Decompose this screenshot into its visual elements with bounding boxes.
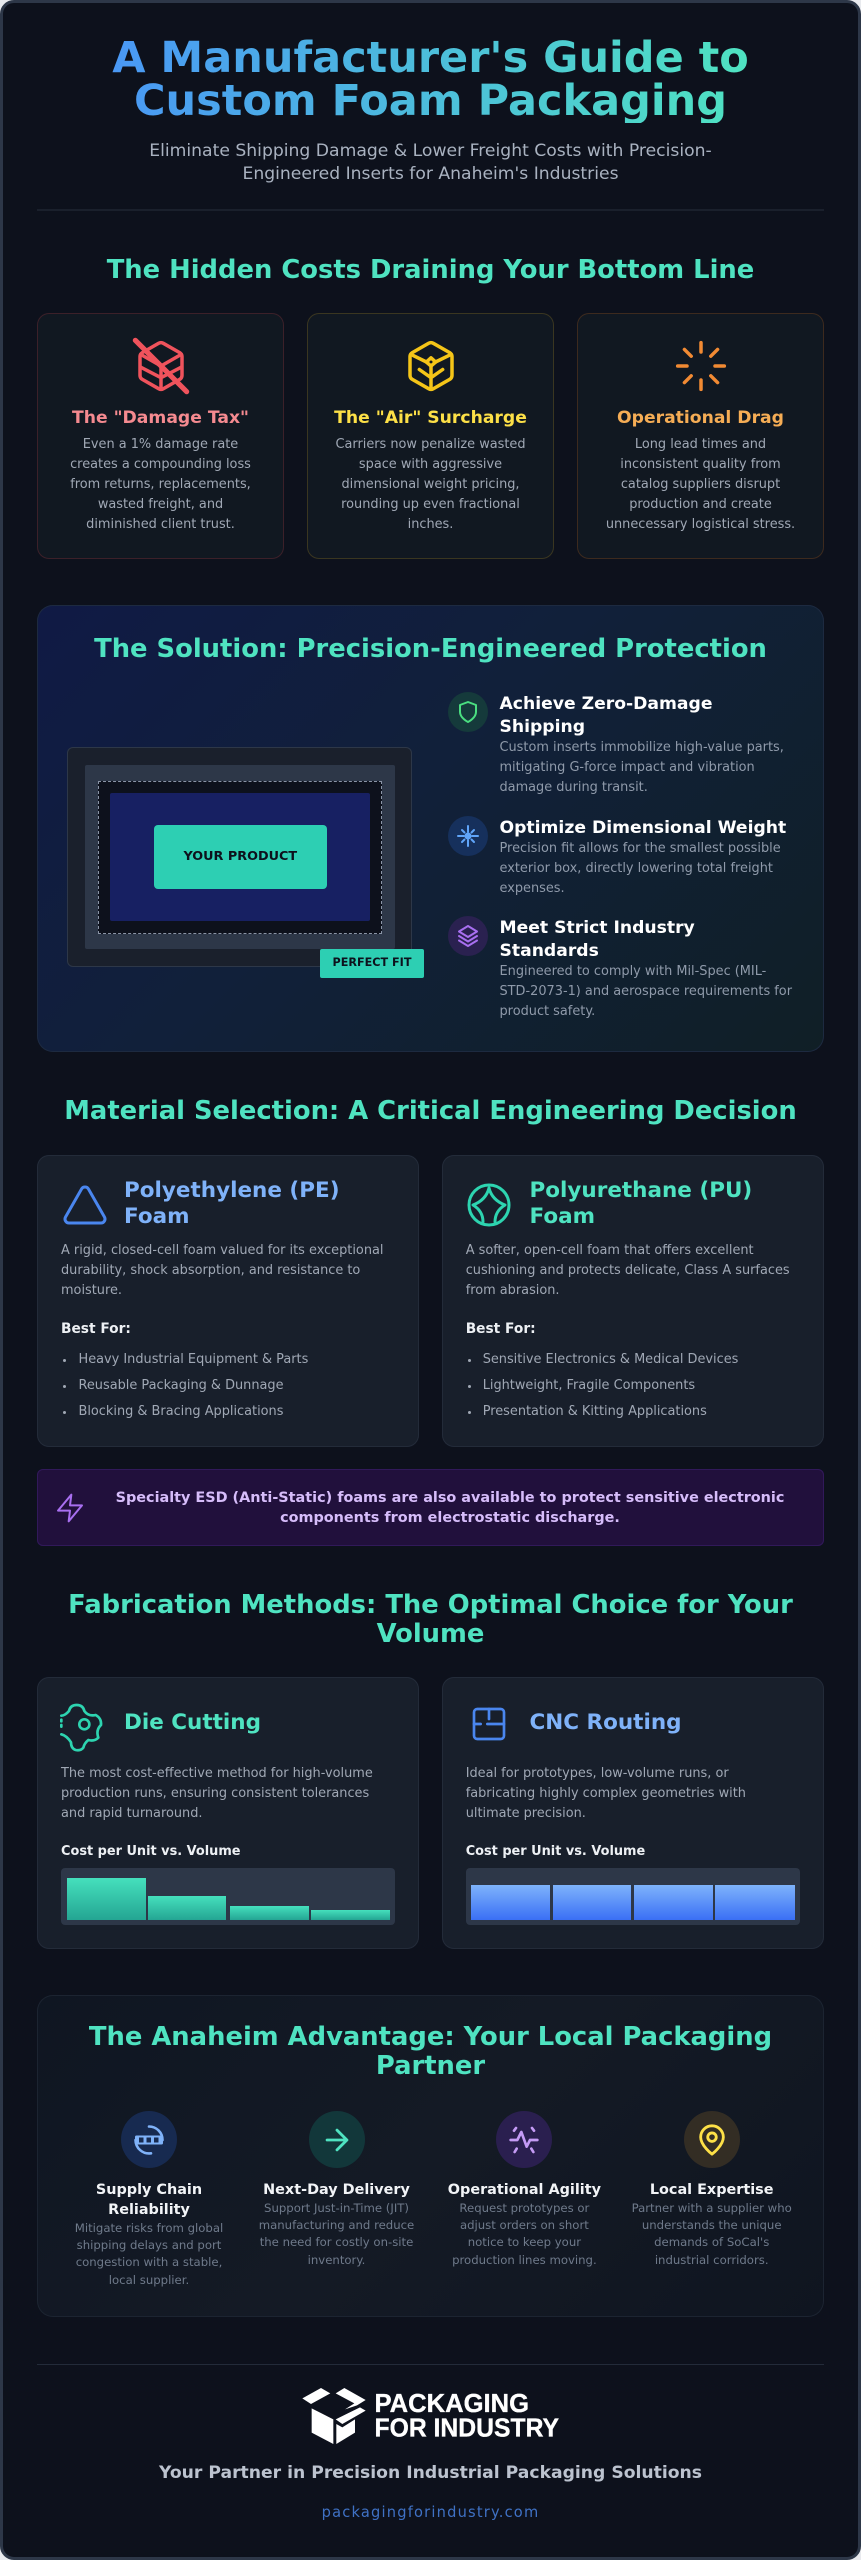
icon: shield — [448, 692, 488, 732]
callout text: components from electrostatic discharge. — [280, 1510, 620, 1526]
panel: die cutting — [37, 1677, 419, 1949]
benefit title: Optimize Dimensional Weight — [500, 818, 786, 838]
perfect fit tag — [320, 949, 424, 978]
benefit title — [500, 918, 695, 960]
logo: packaging for industry — [295, 2380, 570, 2452]
subtitle: Eliminate Shipping Damage & Lower Freight Costs with Precision- — [149, 141, 712, 161]
product: YOUR PRODUCT — [183, 849, 297, 864]
bar — [66, 1878, 146, 1920]
bar — [715, 1885, 795, 1920]
best for label: Best For: — [61, 1321, 131, 1337]
icon: foam cell — [468, 1184, 510, 1226]
icon: zap — [57, 1494, 83, 1522]
advantage text: production lines moving. — [452, 2253, 597, 2267]
title: A Manufacturer's Guide to — [112, 32, 749, 82]
perfect fit tag: PERFECT FIT — [333, 956, 411, 969]
subtitle — [149, 141, 712, 184]
logo wordmark: PACKAGING — [374, 2388, 529, 2418]
icon: damaged box — [132, 338, 190, 394]
panel: polyurethane — [442, 1155, 824, 1447]
heading: hidden costs: The Hidden Costs Draining Your Bottom Line — [107, 254, 754, 284]
chart label: Cost per Unit vs. Volume — [61, 1844, 241, 1859]
foam cavity — [98, 781, 382, 934]
material title — [530, 1178, 752, 1229]
benefit title: Standards — [500, 940, 599, 960]
heading: solution: The Solution: Precision-Engineered Protection — [94, 634, 767, 664]
panel: cnc routing — [442, 1677, 824, 1949]
benefit: standards — [448, 916, 792, 1018]
benefit text: Custom inserts immobilize high-value parts, — [500, 740, 784, 754]
icon: gear — [60, 1704, 102, 1752]
method text: Ideal for prototypes, low-volume runs, or — [466, 1766, 729, 1781]
advantage text: demands of SoCal's — [654, 2235, 769, 2249]
advantage text: Mitigate risks from global — [75, 2221, 223, 2235]
card text: diminished client trust. — [86, 517, 235, 532]
advantage title: Local Expertise — [650, 2182, 774, 2198]
icon: loader — [676, 340, 726, 392]
best for label: Best For: — [466, 1321, 536, 1337]
card text: catalog suppliers disrupt — [621, 477, 780, 492]
card text: production and create — [629, 497, 772, 512]
best for list — [63, 1352, 308, 1419]
card text: unnecessary logistical stress. — [606, 517, 795, 532]
benefit text: expenses. — [500, 880, 565, 896]
header — [112, 32, 749, 184]
best for list: Heavy Industrial Equipment & Parts — [78, 1352, 308, 1367]
heading: fabrication methods: Volume — [377, 1618, 484, 1648]
advantage: local expertise — [632, 2111, 792, 2267]
panel: polyethylene — [37, 1155, 419, 1447]
material title: Polyurethane (PU) — [530, 1178, 752, 1203]
advantage: operational agility — [448, 2111, 601, 2267]
advantage title: Next-Day Delivery — [263, 2182, 410, 2198]
tagline: Your Partner in Precision Industrial Packaging Solutions — [159, 2463, 702, 2483]
advantage text: inventory. — [308, 2253, 365, 2267]
advantage text: Support Just-in-Time (JIT) — [264, 2201, 409, 2215]
advantage text: adjust orders on short — [460, 2218, 589, 2232]
panel: operational drag — [577, 313, 824, 559]
card text — [335, 437, 526, 532]
material text: from abrasion. — [466, 1283, 560, 1298]
advantage text: Request prototypes or — [459, 2201, 589, 2215]
best for list: Presentation & Kitting Applications — [483, 1404, 707, 1419]
advantage title: Reliability — [108, 2202, 190, 2218]
material text: moisture. — [61, 1283, 122, 1298]
card text: dimensional weight pricing, — [341, 477, 520, 492]
bar — [634, 1885, 713, 1920]
benefit title — [500, 694, 712, 736]
benefit text: damage during transit. — [500, 780, 648, 794]
chart label: Cost per Unit vs. Volume — [466, 1844, 645, 1859]
method text: ultimate precision. — [466, 1806, 586, 1821]
heading: material selection: Material Selection: A Critical Engineering Decision — [64, 1096, 797, 1126]
heading: advantage: Partner — [376, 2051, 485, 2081]
icon: triangle — [64, 1186, 106, 1224]
logo wordmark: FOR INDUSTRY — [374, 2412, 559, 2442]
title — [112, 36, 749, 123]
diagram: foam insert — [67, 747, 412, 967]
advantage text: industrial corridors. — [655, 2253, 769, 2267]
benefit text: STD-2073-1) and aerospace requirements for — [500, 984, 792, 998]
material text: A softer, open-cell foam that offers excellent — [466, 1243, 754, 1258]
advantage text: Partner with a supplier who — [632, 2201, 792, 2215]
card text — [606, 437, 795, 532]
card title: The "Air" Surcharge — [334, 408, 527, 428]
material text: cushioning and protects delicate, Class A surfaces — [466, 1263, 790, 1278]
advantage: next-day delivery — [259, 2111, 414, 2267]
card text: wasted freight, and — [98, 497, 223, 512]
panel: air surcharge — [307, 313, 554, 559]
best for list: Sensitive Electronics & Medical Devices — [483, 1352, 738, 1367]
callout: ESD foams — [37, 1469, 824, 1546]
advantage text: understands the unique — [642, 2218, 782, 2232]
benefit: dimensional weight — [448, 816, 786, 896]
method text — [466, 1766, 746, 1821]
icon: arrow — [308, 2111, 364, 2168]
benefit text — [500, 740, 784, 794]
method text: The most cost-effective method for high-volume — [61, 1766, 373, 1781]
benefit text: exterior box, directly lowering total freight — [500, 860, 773, 876]
logo mark — [302, 2388, 366, 2444]
benefit: zero damage — [448, 692, 784, 794]
callout text: Specialty ESD (Anti-Static) foams are also available to protect sensitive electronic — [116, 1490, 784, 1506]
card text: from returns, replacements, — [70, 477, 251, 492]
advantage text — [630, 2200, 794, 2269]
logo wordmark — [374, 2388, 559, 2442]
box wall — [84, 765, 395, 949]
bar — [148, 1896, 226, 1920]
card text: space with aggressive — [359, 457, 502, 472]
card text: creates a compounding loss — [70, 457, 251, 472]
method text — [60, 1766, 373, 1821]
icon: cnc frame — [472, 1708, 506, 1740]
title: Custom Foam Packaging — [134, 76, 727, 126]
icon: layers — [448, 916, 488, 956]
footer — [37, 2380, 824, 2530]
advantage text: the need for costly on-site — [260, 2235, 413, 2249]
advantage text: local supplier. — [109, 2273, 189, 2287]
icon: supply chain — [121, 2111, 177, 2168]
product — [154, 825, 327, 889]
bar — [553, 1885, 631, 1920]
benefit text: mitigating G-force impact and vibration — [500, 760, 755, 774]
card text: inches. — [408, 517, 453, 532]
card text: Long lead times and — [635, 437, 766, 452]
advantage title: Operational Agility — [448, 2182, 601, 2198]
bar — [471, 1885, 550, 1920]
benefit text — [500, 964, 792, 1018]
advantage title — [96, 2182, 202, 2218]
card text: Carriers now penalize wasted — [335, 437, 526, 452]
panel: the solution — [37, 605, 824, 1052]
card text: rounding up even fractional — [341, 497, 520, 512]
benefit text: Precision fit allows for the smallest possible — [500, 840, 781, 856]
best for list — [468, 1352, 738, 1419]
website: packagingforindustry.com — [322, 2504, 539, 2521]
callout text — [116, 1490, 784, 1526]
material text: A rigid, closed-cell foam valued for its exceptional — [61, 1243, 383, 1258]
subtitle: Engineered Inserts for Anaheim's Industries — [242, 164, 619, 184]
benefit text — [500, 840, 781, 896]
benefit text: product safety. — [500, 1004, 595, 1018]
heading: advantage — [89, 2022, 772, 2081]
bar — [230, 1906, 308, 1920]
icon: map pin — [684, 2111, 740, 2168]
benefit text: Engineered to comply with Mil-Spec (MIL- — [500, 964, 766, 978]
advantage title: Supply Chain — [96, 2182, 202, 2198]
method title: Die Cutting — [124, 1710, 261, 1735]
bar chart: die cutting cost — [61, 1868, 395, 1925]
panel: damage tax — [37, 313, 284, 559]
card title: The "Damage Tax" — [72, 408, 249, 428]
advantage text — [259, 2201, 414, 2267]
best for list: Blocking & Bracing Applications — [78, 1404, 283, 1419]
advantage text: manufacturing and reduce — [259, 2218, 414, 2232]
benefit title: Meet Strict Industry — [500, 918, 695, 938]
method title: CNC Routing — [530, 1710, 682, 1735]
icon: activity — [496, 2111, 552, 2168]
material text: durability, shock absorption, and resistance to — [61, 1263, 360, 1278]
material title: Polyethylene (PE) — [124, 1178, 340, 1203]
best for list: Reusable Packaging & Dunnage — [78, 1378, 284, 1393]
advantage text — [452, 2201, 597, 2267]
foam insert — [110, 793, 370, 921]
panel: anaheim advantage — [37, 1995, 824, 2317]
method text: and rapid turnaround. — [61, 1806, 202, 1821]
advantage text: notice to keep your — [468, 2235, 581, 2249]
best for list: Lightweight, Fragile Components — [483, 1378, 695, 1393]
benefit title: Shipping — [500, 716, 585, 736]
method text: production runs, ensuring consistent tolerances — [61, 1786, 369, 1801]
material text — [466, 1243, 790, 1298]
bar — [311, 1910, 390, 1920]
card text — [70, 437, 251, 532]
heading: fabrication methods — [68, 1590, 793, 1648]
bar chart: cnc cost — [466, 1868, 800, 1925]
icon: burst — [448, 816, 488, 856]
heading: fabrication methods: Fabrication Methods: The Optimal Choice for Your — [68, 1590, 793, 1620]
advantage: supply chain — [75, 2111, 223, 2287]
material title: Foam — [124, 1204, 190, 1229]
material title: Foam — [530, 1204, 595, 1229]
material text — [61, 1243, 383, 1298]
material title — [124, 1178, 340, 1229]
card text: inconsistent quality from — [620, 457, 781, 472]
card title: Operational Drag — [617, 408, 784, 428]
method text: fabricating highly complex geometries with — [466, 1786, 746, 1801]
advantage text — [75, 2221, 223, 2287]
benefit title: Achieve Zero-Damage — [500, 694, 712, 714]
heading: advantage: The Anaheim Advantage: Your Local Packaging — [89, 2022, 772, 2052]
advantage text: congestion with a stable, — [76, 2255, 222, 2269]
advantage text: shipping delays and port — [77, 2238, 221, 2252]
card text: Even a 1% damage rate — [83, 437, 238, 452]
icon: box — [408, 340, 454, 392]
